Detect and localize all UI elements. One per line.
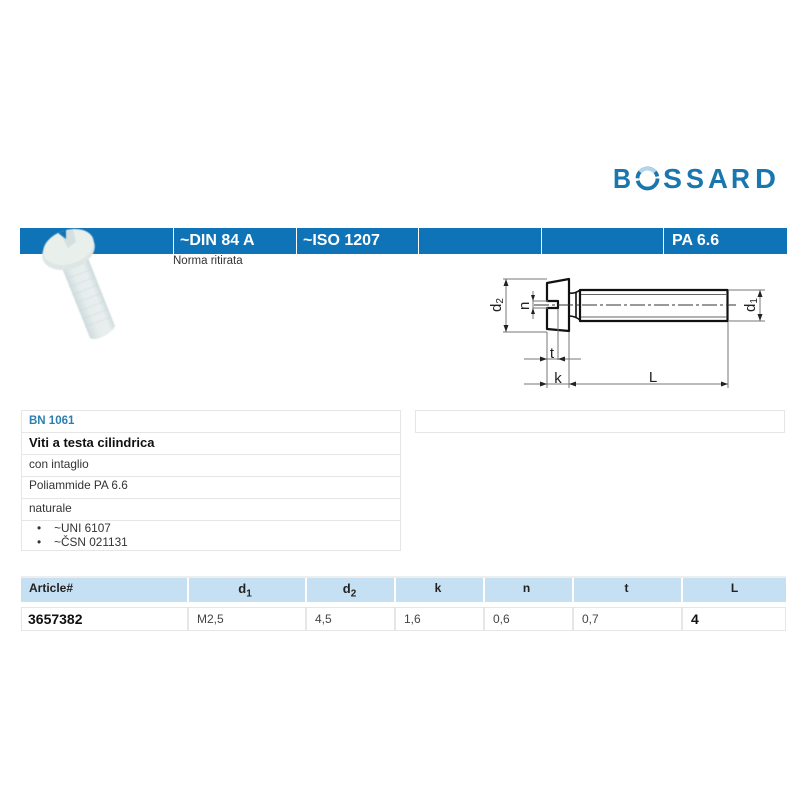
data row: 0,7 <box>582 612 599 626</box>
dimension labels: d <box>488 304 505 312</box>
header cells: t <box>624 581 628 595</box>
header cells: k <box>435 581 441 595</box>
header bar: PA 6.6 <box>672 232 719 249</box>
data row: 1,6 <box>404 612 421 626</box>
data row: 4 <box>691 611 699 627</box>
header cells: Article# <box>29 581 73 595</box>
data row: 0,6 <box>493 612 510 626</box>
screw head <box>37 223 100 276</box>
empty side panel <box>415 410 785 433</box>
table: article data <box>21 576 786 631</box>
dimension lines <box>503 279 765 388</box>
centre line <box>534 304 736 306</box>
header cells <box>21 578 786 602</box>
data row: 3657382 <box>28 611 83 627</box>
data row <box>21 607 786 631</box>
data row: M2,5 <box>197 612 224 626</box>
head outline <box>547 279 569 331</box>
dimension labels: 1 <box>749 298 760 304</box>
data row: 4,5 <box>315 612 332 626</box>
dimension labels: d <box>742 304 759 312</box>
screw shank with thread <box>62 258 115 339</box>
material: Poliammide PA 6.6 <box>29 478 128 492</box>
logo ring <box>638 168 658 188</box>
header cells: L <box>731 581 738 595</box>
screw slot <box>60 229 76 248</box>
header cells: d2 <box>343 581 356 600</box>
product name <box>21 432 401 455</box>
dimension labels: L <box>649 369 657 386</box>
equivalent standards: • ~UNI 6107 <box>37 521 111 535</box>
standard number: BN 1061 <box>29 415 74 427</box>
neck <box>569 290 580 320</box>
product photo: plastic screw <box>42 228 116 340</box>
header cells: d1 <box>238 581 252 600</box>
shank <box>580 290 728 321</box>
dimension labels: t <box>550 345 555 362</box>
norm status note: Norma ritirata <box>173 255 243 267</box>
drive type <box>21 454 401 477</box>
logo: Bossard <box>613 164 776 194</box>
header cells: n <box>523 581 530 595</box>
panel: product description <box>21 410 401 551</box>
equivalent standards <box>21 520 401 551</box>
logo letters <box>613 163 776 194</box>
header bar: ~ISO 1207 <box>303 232 380 249</box>
finish: naturale <box>29 501 72 515</box>
finish <box>21 498 401 521</box>
table outer rule <box>21 576 786 578</box>
dimension labels: 2 <box>495 298 506 304</box>
dimension labels <box>488 298 760 387</box>
drive type: con intaglio <box>29 457 89 471</box>
header bar <box>20 228 787 254</box>
product name: Viti a testa cilindrica <box>29 435 154 450</box>
header bar: ~DIN 84 A <box>180 232 255 249</box>
material <box>21 476 401 499</box>
standard number <box>21 410 401 433</box>
dimension labels: n <box>516 302 533 310</box>
dimension arrows <box>504 279 762 386</box>
equivalent standards: • ~ČSN 021131 <box>37 534 128 548</box>
dimension labels: k <box>554 370 562 387</box>
technical drawing <box>488 278 765 388</box>
